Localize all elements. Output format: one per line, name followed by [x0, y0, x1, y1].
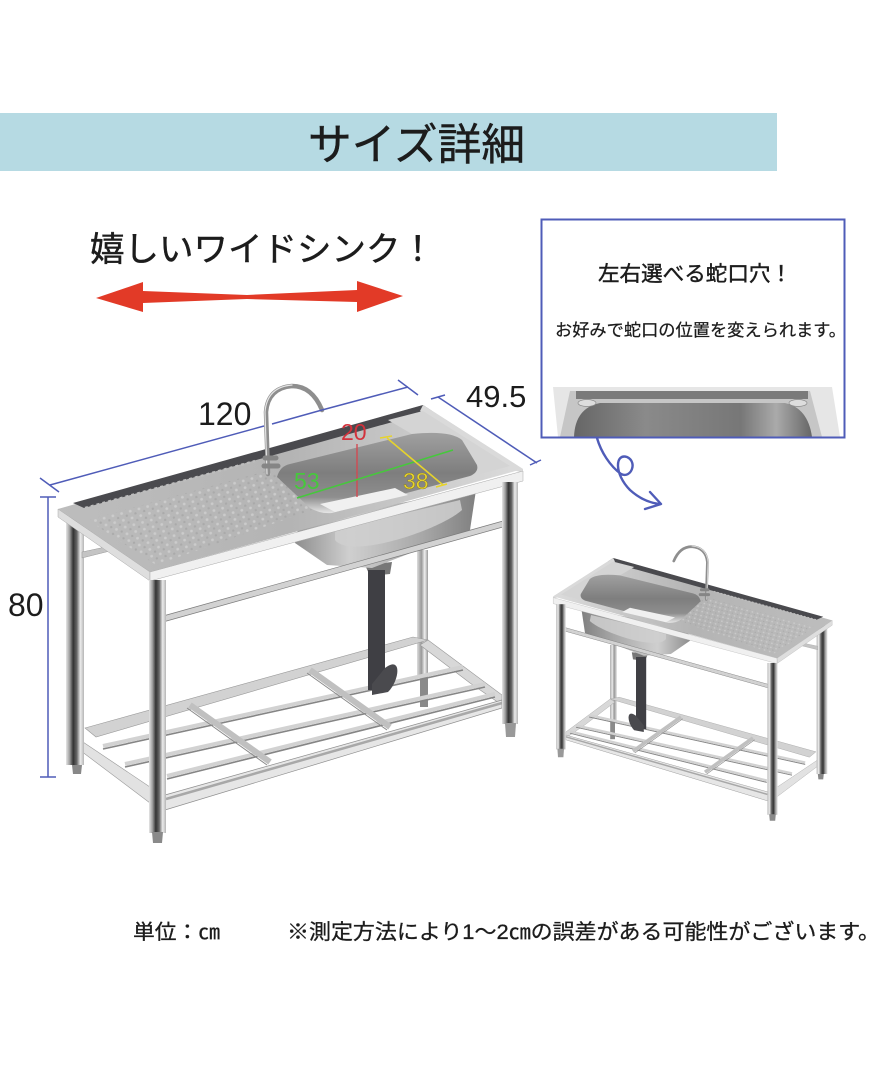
- callout text: お好みで蛇口の位置を変えられます。: [555, 321, 846, 340]
- footnote: measurement tolerance: ※測定方法により1～2㎝の誤差がある可能性がございます。: [287, 920, 869, 944]
- main sink illustration: [58, 385, 523, 843]
- header band: [0, 113, 777, 171]
- dimension: width 120: [40, 380, 418, 492]
- callout panel: faucet hole: [542, 220, 846, 438]
- sink close-up: [553, 387, 840, 437]
- dimension: width 120: 120: [198, 396, 251, 432]
- footnote: unit: 単位：㎝: [133, 921, 220, 944]
- second sink illustration, mirrored: [553, 546, 832, 821]
- dimension: depth 49.5: [431, 379, 541, 465]
- basin dimension: bowl height 20: [341, 419, 367, 497]
- dimension: depth 49.5: 49.5: [466, 379, 526, 414]
- double-headed red arrow: [96, 281, 403, 312]
- basin dimension: bowl width 38: [380, 436, 447, 494]
- callout heading: 左右選べる蛇口穴！: [598, 262, 792, 286]
- basin dimension: bowl width 38: 38: [403, 468, 429, 494]
- basin dimension: bowl length 53: [294, 450, 453, 498]
- title: サイズ詳細: [308, 122, 525, 170]
- heading: wide sink: 嬉しいワイドシンク！: [90, 231, 435, 269]
- dimension: height 80: 80: [8, 587, 44, 623]
- basin dimension: bowl height 20: 20: [341, 419, 367, 445]
- curly arrow: [597, 438, 661, 509]
- basin dimension: bowl length 53: 53: [294, 468, 320, 494]
